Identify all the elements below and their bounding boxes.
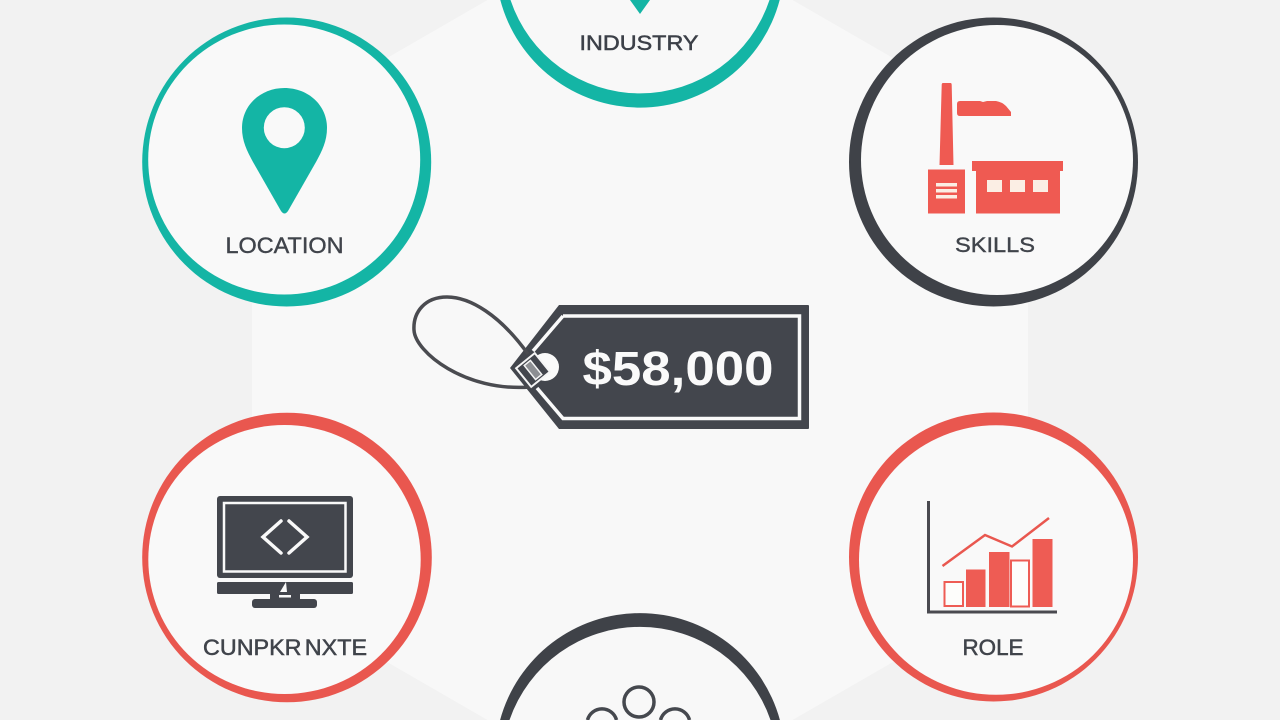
- icon: location pin: [242, 88, 327, 214]
- circle: team: [500, 613, 780, 720]
- tag hole: [531, 353, 559, 381]
- circle: location: [142, 18, 431, 306]
- label: language: CUNPKR NXTE: [203, 635, 367, 660]
- label: industry: INDUSTRY: [580, 31, 698, 55]
- tag inner border: [533, 316, 800, 418]
- icon: factory: [928, 83, 1063, 214]
- icon: bar chart: [928, 501, 1057, 612]
- circle: skills: [849, 18, 1138, 306]
- circle: industry: [500, 0, 780, 108]
- icon: industry pin tip: [630, 0, 650, 14]
- label: location: LOCATION: [226, 233, 344, 258]
- icon: monitor with code: [217, 496, 353, 608]
- tag string loop: [414, 297, 530, 387]
- icon: team circles: [588, 687, 690, 720]
- circle: role: [849, 412, 1138, 702]
- price text: $58,000: [582, 343, 774, 396]
- label: skills: SKILLS: [955, 233, 1035, 257]
- price tag: [414, 297, 809, 429]
- tag body: [510, 305, 809, 429]
- tag clip: [516, 353, 550, 387]
- circle: language: [142, 413, 432, 702]
- label: role: ROLE: [962, 635, 1024, 660]
